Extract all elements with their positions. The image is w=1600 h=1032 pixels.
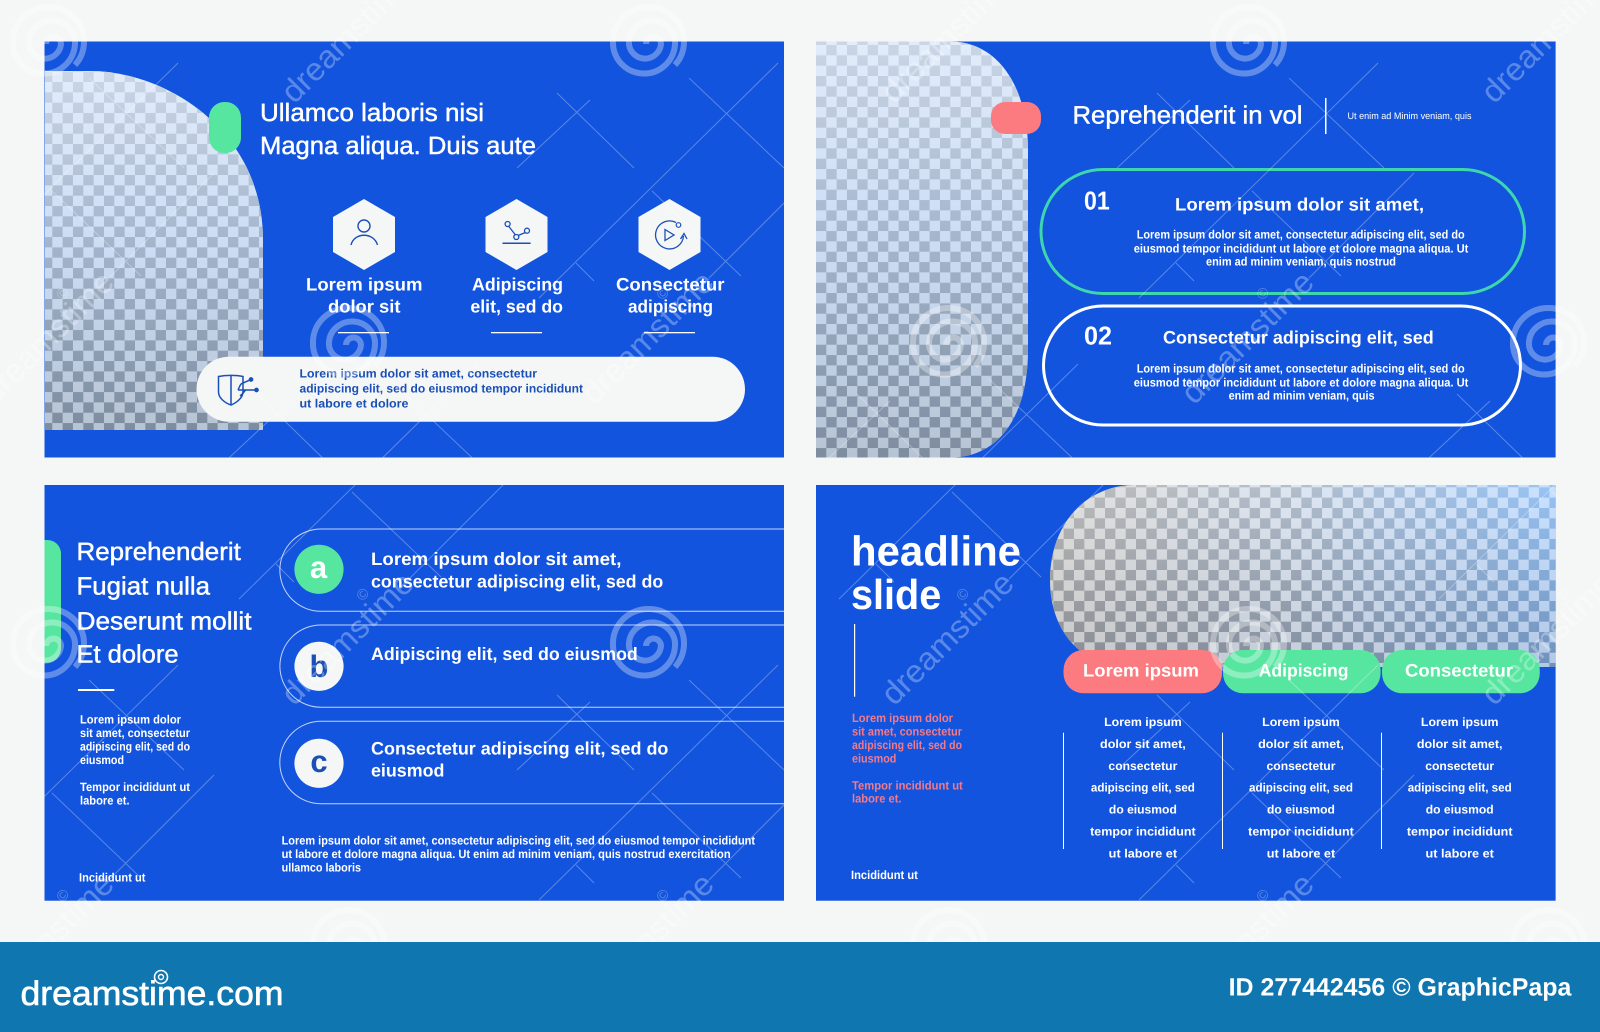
icon: graph hexagon	[486, 199, 548, 270]
red accent pill	[991, 102, 1041, 134]
watermark wordmarks: dreamstime	[1174, 866, 1321, 1013]
tab: Adipiscing: Adipiscing	[1259, 661, 1348, 681]
pink side text: adipiscing elit, sed do	[852, 738, 962, 752]
watermark wordmarks: ©	[1253, 886, 1273, 906]
heading: slide two: Reprehenderit in vol	[1072, 102, 1302, 130]
tab: Lorem ipsum: Lorem ipsum	[1083, 661, 1199, 681]
heading: slide one: Magna aliqua. Duis aute	[260, 132, 536, 160]
column two: adipiscing elit, sed	[1249, 781, 1353, 795]
column two: dolor sit amet,	[1258, 737, 1344, 751]
card 02: Lorem ipsum dolor sit amet, consectetur adipiscing elit, sed do	[1137, 362, 1465, 376]
tab: Consectetur	[1382, 650, 1540, 693]
watermark wordmarks: ©	[353, 585, 373, 605]
short divider	[78, 689, 114, 691]
row a: a	[310, 550, 328, 585]
side text: labore et.	[80, 794, 130, 808]
heading: slide three: Et dolore	[76, 641, 178, 669]
card 01: 01	[1084, 185, 1110, 215]
image placeholder: slide one	[45, 71, 263, 430]
icon: shield	[218, 375, 258, 405]
pink side text	[852, 711, 963, 806]
column one	[1063, 715, 1196, 860]
panel: slide one	[44, 42, 784, 458]
row c: c	[310, 744, 328, 779]
heading: slide one: Ullamco laboris nisi	[260, 99, 484, 127]
row b: b	[310, 649, 328, 684]
vertical divider	[854, 624, 855, 697]
heading divider	[1325, 98, 1326, 134]
headline	[851, 528, 1021, 618]
card 01	[1041, 170, 1524, 294]
column one: dolor sit amet,	[1100, 737, 1186, 751]
callout text: adipiscing elit, sed do eiusmod tempor incididunt	[300, 382, 583, 396]
side text: adipiscing elit, sed do	[80, 740, 190, 754]
column two: tempor incididunt	[1248, 824, 1354, 838]
side text: sit amet, consectetur	[80, 726, 190, 740]
panel: slide three	[44, 485, 784, 901]
feature label: Consectetur: Consectetur	[616, 274, 724, 294]
card 02	[1044, 306, 1520, 425]
watermark wordmarks: ©	[53, 886, 73, 906]
row c	[280, 721, 784, 804]
feature label: Adipiscing: elit, sed do	[470, 296, 563, 316]
card 01: enim ad minim veniam, quis nostrud	[1206, 255, 1396, 269]
callout text: ut labore et dolore	[300, 397, 409, 411]
feature label: Lorem ipsum	[306, 274, 422, 333]
tab: Consectetur: Consectetur	[1405, 661, 1513, 681]
column three: ut labore et	[1426, 846, 1494, 860]
feature label: Lorem ipsum: Lorem ipsum	[306, 274, 422, 294]
column two: ut labore et	[1267, 846, 1335, 860]
heading: slide three: Fugiat nulla	[76, 573, 210, 601]
watermark wordmarks: dreamstime	[274, 565, 421, 712]
column three: tempor incididunt	[1407, 824, 1513, 838]
card 02: eiusmod tempor incididunt ut labore et dolore magna aliqua. Ut	[1134, 375, 1468, 389]
pink side text: labore et.	[852, 792, 902, 806]
row b	[280, 625, 784, 707]
tab: Adipiscing	[1223, 650, 1381, 693]
panel: slide two	[816, 41, 1556, 458]
column one: adipiscing elit, sed	[1091, 781, 1195, 795]
bottom paragraph	[282, 833, 755, 874]
watermark wordmarks: ©	[653, 284, 673, 304]
headline: slide	[851, 571, 941, 618]
footer logo: dreamstime.com	[20, 975, 284, 1013]
row b: Adipiscing elit, sed do eiusmod	[371, 644, 638, 664]
side text: eiusmod	[80, 753, 124, 767]
pink side text: sit amet, consectetur	[852, 725, 962, 739]
watermark wordmarks: dreamstime	[1174, 264, 1321, 411]
column one: do eiusmod	[1109, 802, 1177, 816]
card 02: enim ad minim veniam, quis	[1229, 389, 1375, 403]
side text: Tempor incididunt ut	[80, 780, 190, 794]
column one: consectetur	[1108, 759, 1178, 773]
watermark wordmarks: ©	[653, 886, 673, 906]
callout text: Lorem ipsum dolor sit amet, consectetur	[300, 367, 537, 381]
image placeholder: slide four	[1050, 485, 1556, 667]
green accent tab	[44, 540, 61, 663]
column three: dolor sit amet,	[1417, 737, 1503, 751]
image placeholder: slide two	[816, 41, 1028, 458]
card 01: Lorem ipsum dolor sit amet,	[1175, 195, 1424, 215]
column three: do eiusmod	[1426, 802, 1494, 816]
callout: white pill	[196, 357, 745, 422]
image credit: ID 277442456 © GraphicPapa	[1229, 974, 1572, 1002]
row a: Lorem ipsum dolor sit amet,	[371, 549, 621, 569]
feature label: Consectetur: adipiscing	[628, 296, 713, 316]
column two	[1222, 715, 1354, 860]
column two: Lorem ipsum	[1262, 715, 1340, 729]
headline: headline	[851, 528, 1021, 574]
watermark wordmarks: dreamstime	[574, 866, 721, 1013]
bottom paragraph: ut labore et dolore magna aliqua. Ut enim ad minim veniam, quis nostrud exercitation	[282, 847, 731, 861]
card 01: Lorem ipsum dolor sit amet, consectetur adipiscing elit, sed do	[1137, 228, 1465, 242]
feature label: Adipiscing	[470, 274, 563, 333]
column three: adipiscing elit, sed	[1408, 781, 1512, 795]
heading: slide three: Reprehenderit	[76, 538, 241, 566]
footer bar	[0, 942, 1600, 1032]
row c: Consectetur adipiscing elit, sed do	[371, 739, 668, 759]
watermark wordmarks: dreamstime	[874, 565, 1021, 712]
watermark wordmarks: ©	[1553, 585, 1573, 605]
icon: play cycle hexagon	[638, 199, 700, 270]
column three	[1381, 715, 1513, 860]
callout text	[300, 367, 583, 411]
watermark wordmarks: ©	[53, 284, 73, 304]
card 01: eiusmod tempor incididunt ut labore et dolore magna aliqua. Ut	[1134, 241, 1468, 255]
heading: slide three: Deserunt mollit	[76, 607, 252, 635]
row a: consectetur adipiscing elit, sed do	[371, 571, 663, 591]
watermark wordmarks: dreamstime	[574, 264, 721, 411]
footer label: Incididunt ut	[851, 868, 918, 882]
panel: slide four	[816, 485, 1556, 901]
subheading: Ut enim ad Minim veniam, quis	[1348, 111, 1472, 122]
column two: do eiusmod	[1267, 802, 1335, 816]
bottom paragraph: Lorem ipsum dolor sit amet, consectetur adipiscing elit, sed do eiusmod tempor incididunt	[282, 833, 755, 847]
column one: Lorem ipsum	[1104, 715, 1182, 729]
icon: person hexagon	[333, 199, 395, 270]
feature label: Lorem ipsum: dolor sit	[328, 296, 401, 316]
green accent pill	[209, 102, 241, 153]
footer label: Incididunt ut	[79, 870, 145, 884]
column two: consectetur	[1267, 759, 1336, 773]
tab: Lorem ipsum	[1064, 650, 1222, 693]
pink side text: eiusmod	[852, 751, 896, 765]
row c: eiusmod	[371, 761, 444, 781]
feature label: Adipiscing: Adipiscing	[472, 274, 563, 294]
column three: Lorem ipsum	[1421, 715, 1498, 729]
pink side text: Lorem ipsum dolor	[852, 711, 953, 725]
side text	[80, 712, 190, 808]
bottom paragraph: ullamco laboris	[282, 860, 361, 874]
pink side text: Tempor incididunt ut	[852, 778, 963, 792]
watermark wordmarks: ©	[953, 585, 973, 605]
column three: consectetur	[1425, 759, 1494, 773]
heading: slide one	[260, 99, 536, 160]
watermark wordmarks: ©	[1253, 284, 1273, 304]
heading: slide three	[76, 538, 252, 669]
column one: tempor incididunt	[1090, 824, 1196, 838]
side text: Lorem ipsum dolor	[80, 712, 181, 726]
column one: ut labore et	[1109, 846, 1177, 860]
card 02: 02	[1084, 320, 1112, 350]
feature label: Consectetur	[616, 274, 724, 333]
row a	[280, 529, 784, 611]
card 02: Consectetur adipiscing elit, sed	[1163, 327, 1434, 347]
